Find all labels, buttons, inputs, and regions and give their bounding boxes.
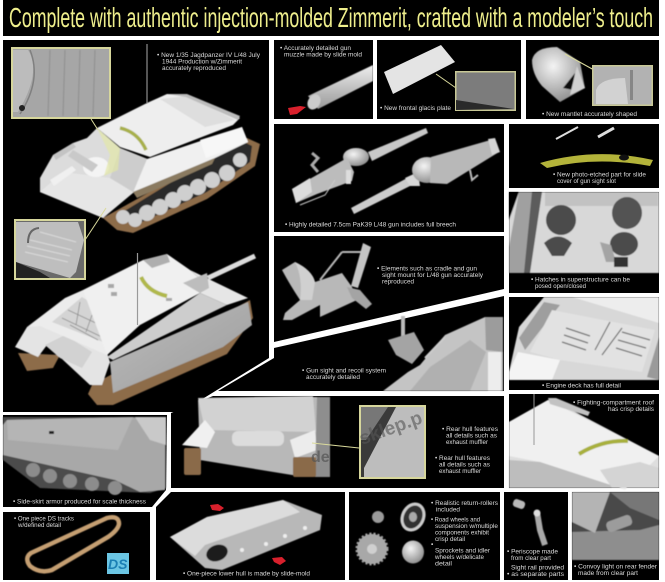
- panel: lower hull: [156, 492, 345, 580]
- rear hull: [15, 325, 110, 385]
- caption: has crisp details: [608, 406, 655, 413]
- caption: cover of gun sight slot: [557, 178, 616, 185]
- panel: photo-etched part: [509, 124, 659, 188]
- idler wheel: [402, 540, 424, 564]
- DS logo: DS: [108, 556, 128, 572]
- right gun assembly: [351, 138, 500, 214]
- caption: exhaust muffler: [446, 439, 489, 446]
- caption: [431, 500, 499, 568]
- caption: [302, 368, 386, 381]
- caption: suspension w/multiple: [435, 523, 498, 530]
- caption: [157, 52, 261, 72]
- inset: [592, 65, 653, 106]
- top tank model: [40, 94, 260, 233]
- left gun assembly: [292, 128, 428, 205]
- caption: Sight rail provided: [511, 564, 564, 572]
- panel: convoy light: [572, 492, 659, 580]
- photo-etched slide cover: [540, 154, 653, 168]
- panel: wheels: [349, 492, 500, 580]
- panel: fighting-compartment roof: [509, 394, 659, 490]
- caption: • Rear hull features: [435, 455, 491, 462]
- small etched strips: [556, 127, 614, 139]
- caption: [531, 276, 630, 290]
- line to inset: [312, 443, 359, 448]
- caption: [377, 266, 484, 286]
- recoil system: [383, 316, 503, 391]
- DS logo: [107, 553, 129, 574]
- caption: [507, 548, 565, 578]
- line to lower inset: [85, 208, 106, 240]
- panel: main tank views: [3, 40, 269, 412]
- watermark: sklep.p: [357, 408, 425, 450]
- caption: [280, 45, 362, 58]
- line to inset: [436, 74, 456, 88]
- caption: posed open/closed: [535, 283, 586, 290]
- panel: side-skirt armor: [3, 415, 167, 507]
- panel: gun muzzle: [274, 40, 373, 119]
- vertical pointer line: [136, 253, 138, 325]
- road wheel: [396, 498, 430, 536]
- caption: made from clear part: [578, 570, 638, 577]
- yellow tinted highlight: [97, 128, 120, 176]
- caption: exhaust muffler: [439, 468, 482, 475]
- road wheels: [116, 153, 247, 227]
- caption: • Realistic return-rollers: [431, 500, 499, 507]
- panel: 7.5cm gun: [274, 124, 504, 232]
- caption: components exhibit: [435, 530, 489, 536]
- inset: [359, 405, 426, 479]
- front hull: [40, 128, 150, 218]
- caption: • Rear hull features: [442, 426, 499, 433]
- return roller: [372, 511, 384, 523]
- panel: elements cradle: [274, 236, 504, 342]
- caption: included: [436, 506, 460, 514]
- panel: mantlet: [526, 40, 659, 119]
- caption: • as separate parts: [507, 571, 565, 578]
- red arrow: [272, 557, 286, 565]
- caption: • Convoy light on rear fender: [574, 564, 658, 570]
- vertical pointer line: [533, 394, 535, 445]
- periscope part: [512, 498, 545, 545]
- superstructure roof: [83, 254, 207, 355]
- panel: gun sight and recoil: [218, 296, 504, 391]
- zimmerit inset top: [11, 47, 111, 119]
- panel: frontal glacis plate: [377, 40, 521, 119]
- caption: accurately reproduced: [162, 65, 226, 72]
- line to inset: [565, 54, 594, 70]
- caption: reproduced: [382, 278, 414, 286]
- lower hull model: [170, 500, 322, 570]
- red arrow: [288, 106, 306, 115]
- zimmerit inset lower: [14, 219, 86, 280]
- caption: • New frontal glacis plate: [380, 105, 451, 112]
- hatch photo: [509, 192, 659, 273]
- caption: • New 1/35 Jagdpanzer IV L/48 July: [157, 52, 261, 59]
- watermark: de: [311, 449, 330, 466]
- caption: • New mantlet accurately shaped: [542, 111, 637, 118]
- rear track: [18, 353, 60, 371]
- caption: • Engine deck has full detail: [542, 382, 622, 390]
- side track: [88, 300, 253, 405]
- mantlet part: [532, 47, 585, 102]
- panel: engine deck: [509, 297, 659, 390]
- roof details: [108, 284, 172, 301]
- caption: crisp detail: [435, 536, 465, 543]
- caption: all details such as: [446, 432, 498, 440]
- gun mantlet: [183, 273, 209, 293]
- inset: [455, 71, 516, 111]
- caption: accurately detailed: [306, 374, 360, 381]
- gun barrel: [305, 65, 373, 112]
- caption: • Elements such as cradle and gun: [377, 266, 477, 272]
- panel: periscope: [504, 492, 568, 580]
- caption: 1944 Production w/Zimmerit: [162, 58, 242, 66]
- caption: • Side-skirt armor produced for scale thickness: [13, 498, 147, 506]
- hull side plate: [133, 127, 248, 193]
- track loop: [27, 517, 119, 571]
- caption: sight mount for L/48 gun accurately: [382, 272, 484, 279]
- bottom tank model: [15, 254, 255, 405]
- glacis plate: [110, 148, 147, 192]
- gun mantlet: [83, 157, 109, 177]
- upper sloped plate: [107, 293, 227, 360]
- caption: • Periscope made: [507, 548, 558, 556]
- panel: hatches: [509, 192, 659, 293]
- red arrow: [210, 504, 224, 511]
- caption: w/defined detail: [17, 522, 61, 529]
- skirt photo: [3, 417, 166, 495]
- caption: all details such as: [439, 462, 491, 468]
- roof model: [509, 398, 659, 490]
- side skirt: [110, 302, 252, 393]
- caption: •: [431, 542, 434, 548]
- caption: • One piece DS tracks: [14, 516, 75, 522]
- sprocket: [357, 534, 387, 564]
- gun barrel: [208, 256, 255, 278]
- caption: • Gun sight and recoil system: [302, 368, 386, 374]
- caption: detail: [435, 560, 453, 568]
- caption: [435, 426, 499, 475]
- convoy light photo: [572, 492, 659, 560]
- caption: [553, 172, 646, 185]
- track: [103, 138, 260, 233]
- caption: Sprockets and idler: [435, 548, 491, 554]
- caption: • Fighting-compartment roof: [573, 400, 654, 406]
- cradle and sight mount: [282, 243, 372, 320]
- caption: [14, 516, 75, 529]
- watermark: [311, 408, 425, 466]
- caption: • New photo-etched part for slide: [553, 172, 646, 178]
- caption: [574, 564, 658, 577]
- engine deck: [27, 290, 138, 355]
- suspension shadow: [118, 140, 252, 226]
- roof: [97, 94, 240, 157]
- caption: • Highly detailed 7.5cm PaK39 L/48 gun includes full breech: [285, 222, 456, 228]
- engine deck photo: [509, 297, 659, 380]
- caption: muzzle made by slide mold: [284, 52, 362, 58]
- caption: • Hatches in superstructure can be: [531, 276, 630, 284]
- caption: • One-piece lower hull is made by slide-mold: [183, 570, 310, 578]
- yellow part: [141, 277, 167, 296]
- caption: • Road wheels and: [431, 516, 480, 524]
- vertical pointer line: [146, 44, 148, 103]
- glacis plate: [384, 45, 455, 94]
- caption: [573, 400, 655, 413]
- panel: DS tracks: [3, 512, 150, 580]
- caption: • Accurately detailed gun: [280, 45, 351, 52]
- line to top inset: [91, 119, 98, 130]
- caption: wheels w/delicate: [434, 554, 484, 561]
- rear hull model: [182, 396, 330, 477]
- caption: from clear part: [511, 555, 551, 562]
- panel: rear hull: [171, 396, 504, 488]
